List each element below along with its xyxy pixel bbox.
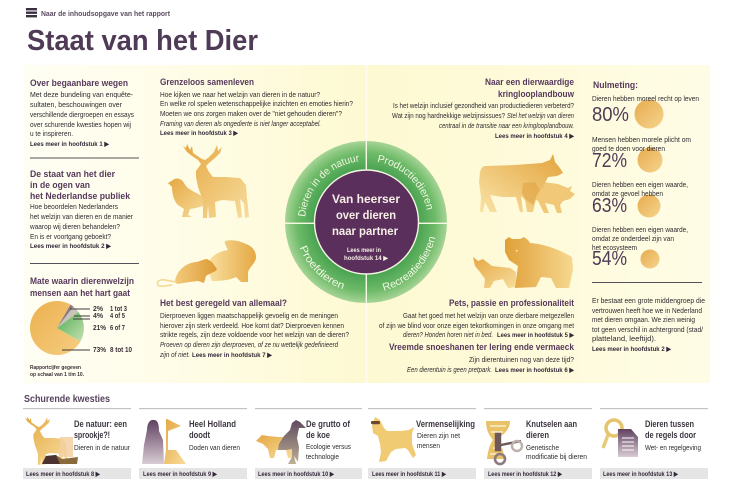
- card: de grutto of de koe: Lees meer in hoofdstuk 10 ▶: [258, 471, 335, 478]
- card: de natuur: [23, 408, 131, 479]
- panel: vreemde snoeshanen: Een dierentuin is geen pretpark.: [407, 365, 492, 374]
- stat: 63%: [592, 180, 688, 218]
- panel: de staat van het dier: [29, 169, 134, 250]
- panel: nulmeting: [592, 80, 699, 270]
- card: heel holland doodt: doodt: [189, 429, 210, 440]
- panel: mate waarin dierenwelzijn: Mate waarin dierenwelzijn: [30, 276, 134, 287]
- card: de natuur: sprookje?!: [74, 429, 110, 440]
- panel: over begaanbare wegen: sultaten, beschouwingen over: [30, 100, 123, 109]
- panel: het best geregeld: Lees meer in hoofdstuk 7 ▶: [192, 352, 273, 359]
- panel: over begaanbare wegen: [30, 78, 134, 148]
- segment label: proefdieren: Proefdieren: [300, 245, 344, 289]
- card: vermenselijking: Lees meer in hoofdstuk 11 ▶: [372, 471, 447, 478]
- stat: 54%: omdat ze onderdeel zijn van: [592, 234, 674, 243]
- panel: over begaanbare wegen: u te inspireren.: [30, 129, 73, 138]
- panel: vreemde snoeshanen: [389, 342, 575, 374]
- card: knutselen aan dieren: [484, 408, 592, 479]
- panel: grenzeloos samenleven: Moeten we ons zorgen maken over de "niet gehouden dieren"?: [160, 109, 342, 118]
- stat: 63%: omdat ze gevoel hebben: [592, 189, 663, 198]
- panel: nulmeting: Nulmeting:: [593, 80, 638, 91]
- panel: pets, passie: of zijn we blind voor onze eigen tekortkomingen in onze omgang met: [379, 321, 574, 330]
- panel: grenzeloos samenleven: En welke rol spelen wetenschappelijke inzichten en emoties hierin?: [160, 99, 353, 108]
- text block: middengroep: Er bestaat een grote middengroep die: [592, 296, 705, 305]
- panel: pets, passie: dieren? Honden horen niet in bed.: [403, 330, 493, 339]
- panel: pets, passie: Gaat het goed met het welzijn van onze dierbare metgezellen: [403, 311, 574, 320]
- panel: grenzeloos samenleven: Framing van dieren als ongedierte is niet langer acceptabel.: [160, 119, 321, 128]
- card: heel holland doodt: Lees meer in hoofdstuk 9 ▶: [143, 471, 218, 478]
- panel: grenzeloos samenleven: Grenzeloos samenleven: [160, 77, 254, 88]
- pie legend: 4 of 5: [110, 313, 125, 320]
- card: de natuur: De natuur: een: [74, 418, 127, 429]
- stat: 54%: het ecosysteem: [592, 243, 637, 252]
- icon: rabbit and rat: [157, 240, 256, 286]
- panel: over begaanbare wegen: verschillende diergroepen en essays: [30, 110, 134, 119]
- panel: kringlooplandbouw: Wat zijn nog hardnekkige welzijnsissues?: [392, 111, 505, 120]
- panel: vreemde snoeshanen: Zijn dierentuinen nog van deze tijd?: [469, 355, 574, 364]
- segment label: recreatiedieren: Recreatiedieren: [382, 237, 436, 291]
- panel: kringlooplandbouw: kringlooplandbouw: [498, 89, 574, 100]
- card: knutselen aan dieren: Knutselen aan: [526, 418, 577, 429]
- panel: mate waarin dierenwelzijn: [30, 276, 134, 378]
- card: de natuur: Lees meer in hoofdstuk 8 ▶: [26, 471, 101, 478]
- pie legend: 21%: [93, 325, 107, 332]
- panel: grenzeloos samenleven: [160, 77, 353, 137]
- panel: de staat van het dier: in de ogen van: [30, 180, 90, 191]
- panel: mate waarin dierenwelzijn: op schaal van 1 t/m 10.: [30, 372, 84, 378]
- panel: de staat van het dier: De staat van het dier: [30, 169, 115, 180]
- pie chart: [30, 301, 90, 355]
- icon: godwit and cow: [256, 420, 306, 464]
- panel: pets, passie: [379, 298, 575, 339]
- stat: 72%: [592, 135, 691, 172]
- icon: magnifier and document: [603, 420, 638, 457]
- centre circle: Lees meer in: [347, 247, 381, 254]
- card: dieren tussen de regels door: Dieren tussen: [645, 418, 694, 429]
- card: dieren tussen de regels door: Lees meer in hoofdstuk 13 ▶: [603, 471, 679, 478]
- panel: de staat van het dier: En is er voortgang geboekt?: [30, 232, 111, 241]
- stat: 72%: goed te doen voor dieren: [592, 144, 665, 153]
- card: knutselen aan dieren: dieren: [526, 429, 549, 440]
- icon: dna and scissors: [486, 421, 522, 464]
- segment label: dieren in de natuur: Dieren in de natuur: [298, 156, 359, 216]
- card: dieren tussen de regels door: Wet- en regelgeving: [645, 443, 701, 452]
- card: knutselen aan dieren: modificatie bij dieren: [526, 452, 587, 461]
- stat: 54%: [592, 225, 688, 270]
- icon: bear and cat: [473, 237, 573, 288]
- panel: mate waarin dierenwelzijn: mensen aan het hart gaat: [30, 288, 131, 299]
- stat: 63%: Dieren hebben een eigen waarde,: [592, 180, 688, 189]
- panel: kringlooplandbouw: Lees meer in hoofdstuk 4 ▶: [495, 133, 575, 140]
- card: de grutto of de koe: [255, 408, 362, 479]
- icon: cow and pig: [479, 154, 575, 213]
- text block: middengroep: Lees meer in hoofdstuk 2 ▶: [592, 346, 672, 353]
- panel: pets, passie: Pets, passie en professionaliteit: [449, 298, 575, 309]
- panel: het best geregeld: hierover zijn sterk verdeeld. Hoe komt dat? Dierproeven kennen: [160, 321, 344, 330]
- panel: de staat van het dier: het Nederlandse publiek: [30, 191, 131, 202]
- panel: kringlooplandbouw: Stel het welzijn van dieren: [507, 111, 574, 120]
- pie legend: 4%: [93, 313, 104, 320]
- panel: grenzeloos samenleven: Lees meer in hoofdstuk 3 ▶: [160, 130, 239, 137]
- panel: het best geregeld: strikte regels, zijn deze voldoende voor het welzijn van de dieren?: [160, 330, 349, 339]
- panel: de staat van het dier: Lees meer in hoofdstuk 2 ▶: [30, 243, 112, 250]
- text block: middengroep: met dieren omgaan. We zien weinig: [592, 315, 695, 324]
- card: de grutto of de koe: technologie: [306, 452, 339, 461]
- text block: middengroep: tot geen verschil in achtergrond (stad/: [592, 325, 703, 334]
- icon: hooded figure and flag: [142, 419, 186, 464]
- icon: contents list: [26, 8, 37, 17]
- stat: 72%: Mensen hebben morele plicht om: [592, 135, 691, 144]
- pie legend: 8 tot 10: [110, 347, 132, 354]
- top link: Naar de inhoudsopgave van het rapport: [41, 9, 170, 18]
- panel: over begaanbare wegen: over schurende kwesties hopen wij: [30, 120, 131, 129]
- stat: 63%: 63%: [592, 195, 627, 217]
- section heading: schurende kwesties: Schurende kwesties: [24, 393, 110, 405]
- pie legend: 1 tot 3: [110, 306, 127, 313]
- centre circle: naar partner: [332, 226, 399, 238]
- stat: 54%: 54%: [592, 248, 627, 270]
- panel: de staat van het dier: het welzijn van dieren en de manier: [30, 212, 134, 221]
- centre circle: over dieren: [336, 210, 396, 222]
- panel: over begaanbare wegen: Lees meer in hoofdstuk 1 ▶: [30, 141, 110, 148]
- panel: over begaanbare wegen: Over begaanbare wegen: [30, 78, 128, 89]
- card: dieren tussen de regels door: de regels door: [645, 429, 696, 440]
- panel: kringlooplandbouw: centraal in de transitie naar een kringlooplandbouw.: [439, 121, 574, 130]
- card: de grutto of de koe: de koe: [306, 429, 330, 440]
- background panel: [24, 65, 710, 383]
- segment label: productiedieren: Productiedieren: [378, 154, 432, 210]
- panel: het best geregeld: Proeven op dieren zijn dierproeven, of ze nu wettelijk gedefinieerd: [160, 340, 339, 349]
- card: vermenselijking: Dieren zijn net: [417, 431, 460, 440]
- pie legend: 6 of 7: [110, 325, 125, 332]
- panel: mate waarin dierenwelzijn: Rapportcijfer gegeven: [30, 365, 81, 371]
- panel: kringlooplandbouw: Is het welzijn inclusief gezondheid van productiedieren verbeterd?: [393, 101, 574, 110]
- panel: de staat van het dier: waarop wij dieren behandelen?: [29, 222, 120, 231]
- card: dieren tussen de regels door: [600, 408, 708, 479]
- card: de grutto of de koe: Ecologie versus: [306, 442, 351, 451]
- panel: het best geregeld: [159, 298, 349, 359]
- icon: dog with sunglasses: [371, 417, 416, 462]
- card: knutselen aan dieren: Genetische: [526, 443, 559, 452]
- card: vermenselijking: mensen: [417, 441, 440, 450]
- panel: grenzeloos samenleven: Hoe kijken we naar het welzijn van dieren in de natuur?: [160, 90, 320, 99]
- panel: het best geregeld: Dierproeven liggen maatschappelijk gevoelig en de meningen: [160, 311, 338, 320]
- text block: middengroep: vertrouwen heeft hoe we in Nederland: [592, 306, 702, 315]
- panel: pets, passie: Lees meer in hoofdstuk 5 ▶: [497, 332, 575, 339]
- card: heel holland doodt: Heel Holland: [189, 418, 236, 429]
- centre circle: [314, 170, 418, 274]
- card: knutselen aan dieren: Lees meer in hoofdstuk 12 ▶: [488, 471, 563, 478]
- panel: kringlooplandbouw: [392, 77, 575, 140]
- text block: middengroep: platteland, leeftijd).: [592, 334, 656, 343]
- panel: de staat van het dier: Hoe beoordelen Nederlanders: [30, 202, 118, 211]
- card: vermenselijking: Vermenselijking: [416, 418, 475, 429]
- panel: vreemde snoeshanen: Lees meer in hoofdstuk 6 ▶: [495, 367, 575, 374]
- stat: 54%: Dieren hebben een eigen waarde,: [592, 225, 688, 234]
- panel: kringlooplandbouw: Naar een dierwaardige: [485, 77, 574, 88]
- pie legend: 2%: [93, 306, 104, 313]
- panel: vreemde snoeshanen: Vreemde snoeshanen ter lering ende vermaeck: [389, 342, 575, 353]
- icon: deer with books: [25, 417, 78, 465]
- centre circle: Van heerser: [332, 194, 401, 206]
- stat: 72%: 72%: [592, 150, 627, 172]
- ring diagram: [285, 141, 447, 303]
- card: de grutto of de koe: De grutto of: [306, 418, 351, 429]
- pie legend: [93, 306, 132, 354]
- pie legend: 73%: [93, 347, 107, 354]
- card: heel holland doodt: Doden van dieren: [189, 443, 240, 452]
- icon: deer and bird: [168, 144, 249, 218]
- card: heel holland doodt: [139, 408, 247, 479]
- centre circle: hoofdstuk 14 ▶: [344, 255, 388, 262]
- card: vermenselijking: [368, 408, 476, 479]
- stat: 80%: [592, 94, 699, 128]
- panel: het best geregeld: Het best geregeld van allemaal?: [160, 298, 287, 309]
- stat: 80%: Dieren hebben moreel recht op leven: [592, 94, 699, 103]
- panel: over begaanbare wegen: Met deze bundeling van enquête-: [30, 90, 134, 99]
- card: de natuur: Dieren in de natuur: [74, 443, 131, 452]
- stat: 80%: 80%: [592, 104, 629, 126]
- title: Staat van het Dier: [27, 25, 258, 57]
- text block: middengroep: [592, 296, 705, 353]
- panel: het best geregeld: zijn of niet.: [159, 350, 190, 359]
